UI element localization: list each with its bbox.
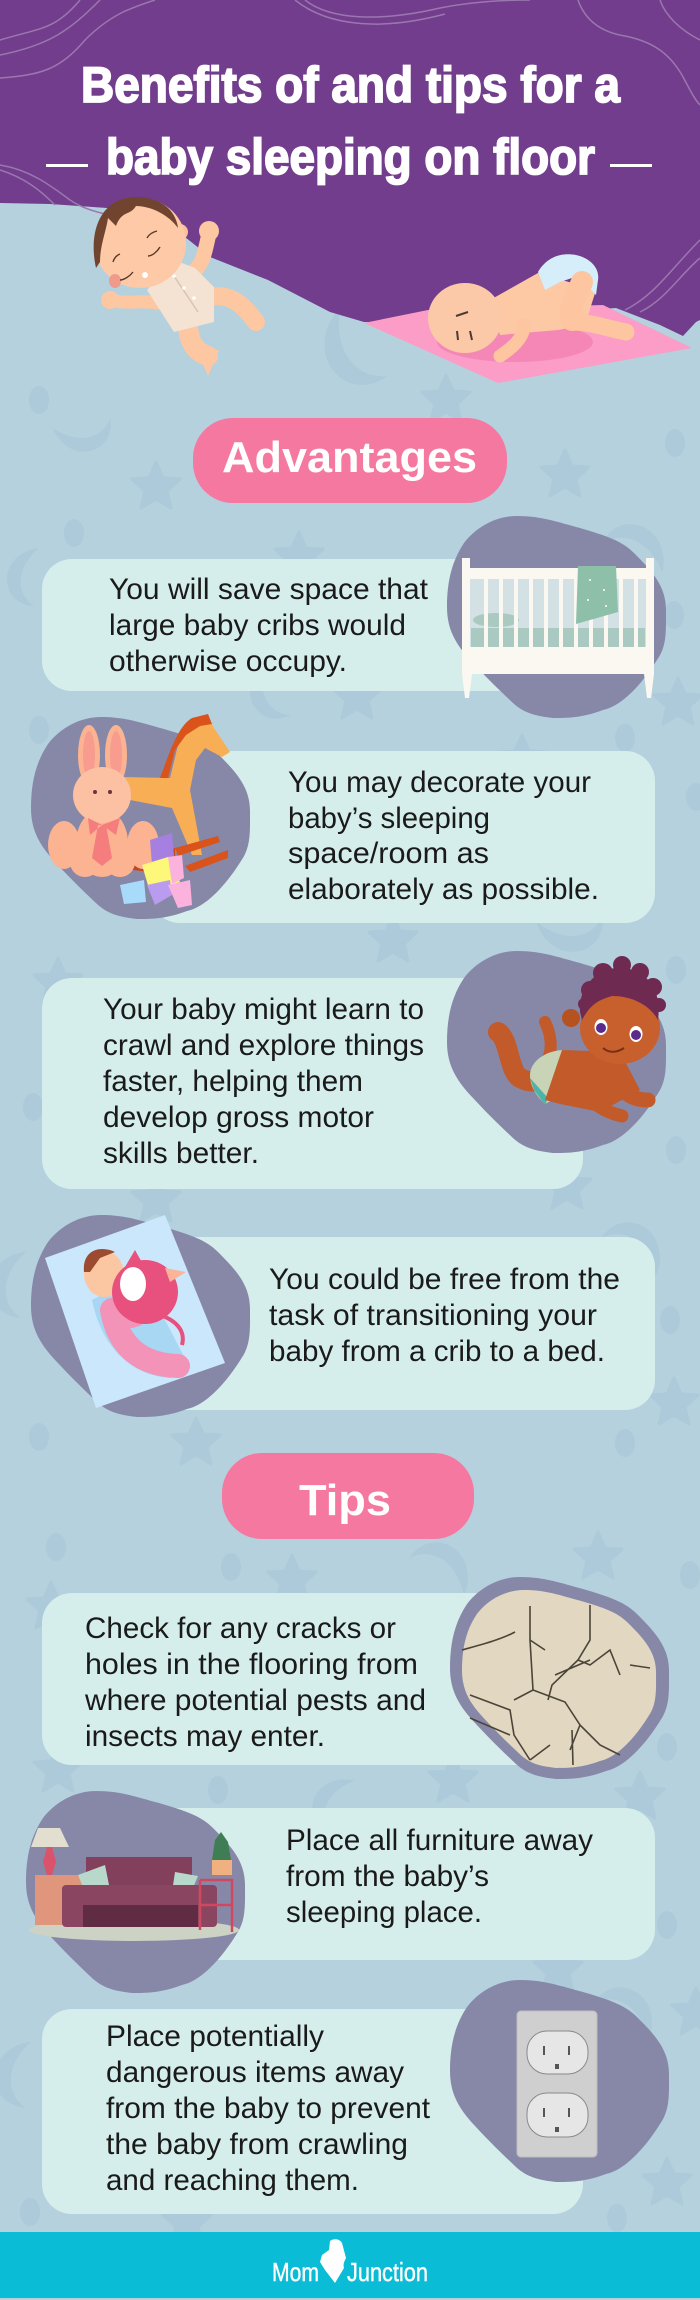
section heading: Tips: Tips bbox=[299, 1476, 391, 1525]
panel: dangerous items: Place potentially bbox=[106, 2020, 324, 2053]
blob and toys icon bbox=[31, 714, 250, 919]
purple header bbox=[0, 0, 700, 336]
panel: decorate space bbox=[150, 751, 655, 923]
panel: dangerous items bbox=[42, 2009, 583, 2214]
panel: furniture away bbox=[150, 1808, 655, 1960]
logo: MomJunction: Mom bbox=[272, 2257, 319, 2287]
blob and wall outlet icon bbox=[450, 1980, 669, 2182]
panel: decorate space: elaborately as possible. bbox=[288, 873, 599, 906]
blob and crib icon bbox=[447, 516, 666, 718]
panel: furniture away: sleeping place. bbox=[286, 1896, 482, 1929]
panel: check flooring: holes in the flooring from bbox=[85, 1648, 418, 1681]
panel: no transition: baby from a crib to a bed. bbox=[269, 1335, 605, 1368]
section heading: Advantages bbox=[193, 418, 507, 503]
panel: crawl and explore: Your baby might learn to bbox=[103, 993, 424, 1026]
panel: check flooring: insects may enter. bbox=[85, 1720, 325, 1753]
panel: save space: large baby cribs would bbox=[109, 609, 406, 642]
panel: crawl and explore: crawl and explore things bbox=[103, 1029, 424, 1062]
panel: no transition bbox=[150, 1237, 655, 1410]
section heading: Tips bbox=[222, 1453, 474, 1539]
panel: save space bbox=[42, 559, 582, 691]
panel: dangerous items: from the baby to prevent bbox=[106, 2092, 431, 2125]
title: baby sleeping on floor bbox=[106, 129, 595, 185]
panel: save space: You will save space that bbox=[109, 573, 429, 606]
panel: dangerous items: and reaching them. bbox=[106, 2164, 359, 2197]
blob and living room icon bbox=[26, 1791, 245, 1993]
blob and cracked floor icon bbox=[450, 1577, 669, 1779]
title: Benefits of and tips for a bbox=[81, 57, 621, 113]
panel: check flooring: Check for any cracks or bbox=[85, 1612, 396, 1645]
panel: crawl and explore: skills better. bbox=[103, 1137, 259, 1170]
illustration: baby on pink mat bbox=[364, 254, 692, 383]
panel: save space: otherwise occupy. bbox=[109, 645, 347, 678]
panel: crawl and explore: faster, helping them bbox=[103, 1065, 363, 1098]
illustration: sleeping baby on its back bbox=[94, 197, 256, 376]
title bbox=[46, 57, 652, 185]
footer band bbox=[0, 2232, 700, 2298]
blob and baby with plush icon bbox=[31, 1215, 250, 1417]
panel: crawl and explore bbox=[42, 978, 583, 1189]
panel: decorate space: You may decorate your bbox=[288, 766, 591, 799]
panel: dangerous items: the baby from crawling bbox=[106, 2128, 408, 2161]
panel: decorate space: space/room as bbox=[288, 837, 489, 870]
logo: MomJunction bbox=[272, 2239, 428, 2287]
panel: check flooring: where potential pests and bbox=[84, 1684, 426, 1717]
panel: decorate space: baby’s sleeping bbox=[288, 802, 490, 835]
blob and crawling baby icon bbox=[447, 951, 666, 1153]
panel: check flooring bbox=[42, 1593, 583, 1765]
panel: crawl and explore: develop gross motor bbox=[103, 1101, 374, 1134]
logo: MomJunction: Junction bbox=[347, 2257, 428, 2287]
panel: furniture away: Place all furniture away bbox=[286, 1824, 593, 1857]
panel: dangerous items: dangerous items away bbox=[106, 2056, 404, 2089]
panel: furniture away: from the baby’s bbox=[286, 1860, 489, 1893]
panel: no transition: You could be free from the bbox=[269, 1263, 620, 1296]
panel: no transition: task of transitioning your bbox=[269, 1299, 597, 1332]
section heading: Advantages: Advantages bbox=[222, 433, 477, 482]
